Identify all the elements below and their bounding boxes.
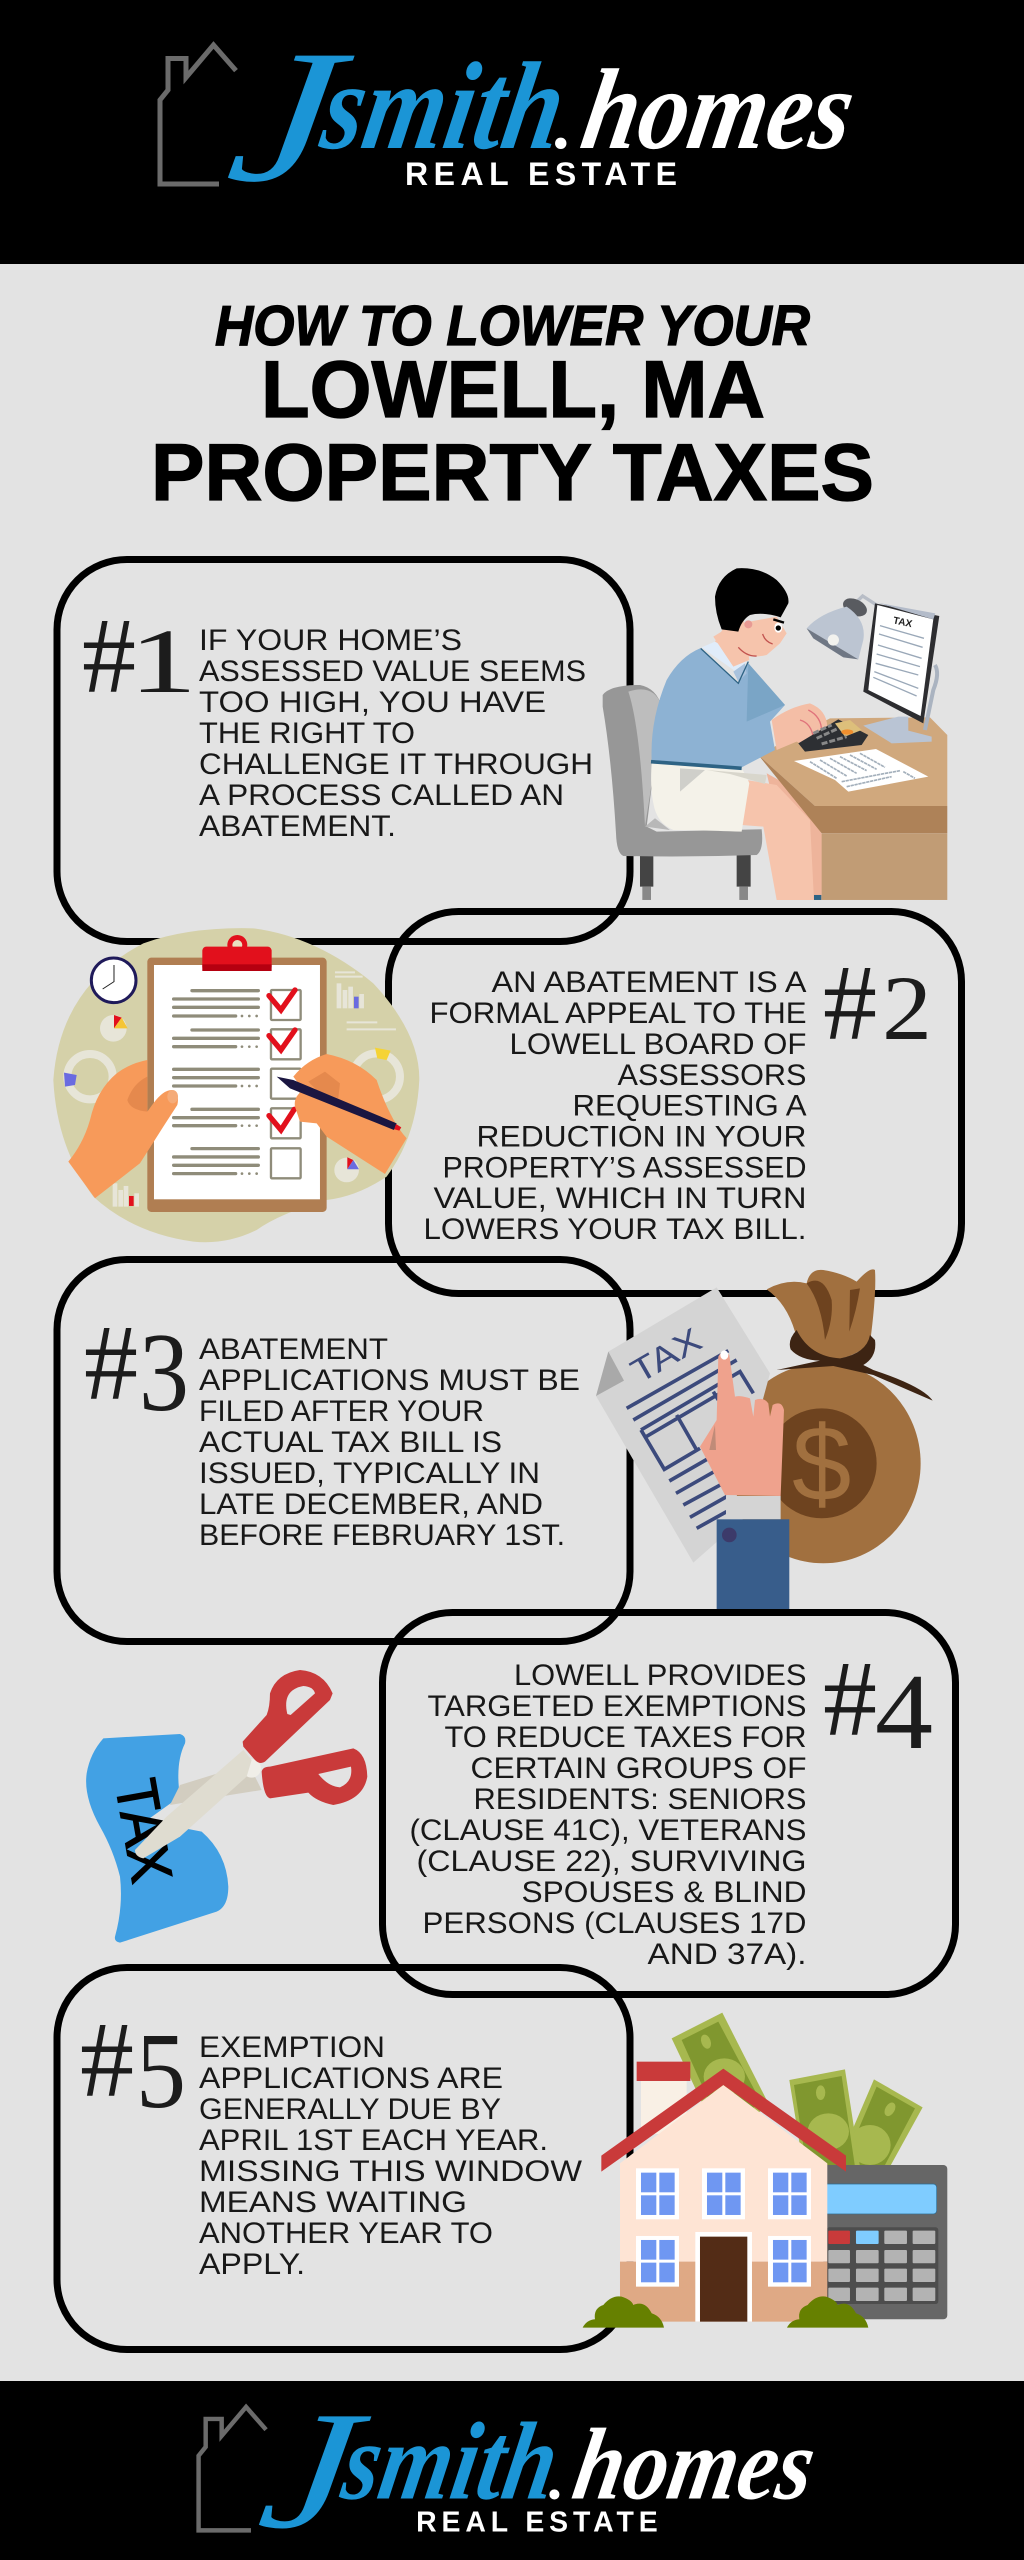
number 4: 4: [875, 1653, 933, 1772]
icon: scissors cutting tax paper: [86, 1670, 367, 1943]
text block 2: PROPERTY’S ASSESSED: [442, 1152, 806, 1184]
icon: tax form, pointing hand and money bag: [596, 1269, 933, 1609]
text block 5: APPLICATIONS ARE: [199, 2062, 503, 2095]
title: PROPERTY TAXES: [151, 428, 874, 518]
logo wordmark J: J: [218, 12, 362, 222]
text block 3: FILED AFTER YOUR: [199, 1395, 484, 1428]
number 2: 2: [882, 957, 932, 1059]
dollar sign: $: [792, 1404, 851, 1524]
panel: step 2: [53, 912, 961, 1294]
logo dot: .: [552, 87, 570, 164]
text block 3: BEFORE FEBRUARY 1ST.: [199, 1519, 565, 1552]
number 3: #: [84, 1304, 138, 1423]
logo wordmark smith: smith: [312, 38, 575, 176]
text block 2: FORMAL APPEAL TO THE: [430, 997, 806, 1030]
text block 5: APRIL 1ST EACH YEAR.: [199, 2124, 548, 2157]
text block 3: [199, 1333, 580, 1552]
title: [151, 294, 874, 518]
text block 5: APPLY.: [199, 2248, 305, 2281]
number 1: 1: [129, 610, 197, 712]
number 2: #: [823, 944, 877, 1063]
pointing hand: [700, 1350, 784, 1496]
text block 1: TOO HIGH, YOU HAVE: [199, 686, 546, 719]
money: [672, 2013, 923, 2167]
text block 4: (CLAUSE 22), SURVIVING: [416, 1845, 806, 1878]
text block 2: VALUE, WHICH IN TURN: [434, 1182, 806, 1215]
text block 2: ASSESSORS: [618, 1059, 806, 1092]
text block 5: [199, 2031, 583, 2281]
icon: man at desk with calculator: [603, 568, 947, 900]
text block 3: ISSUED, TYPICALLY IN: [199, 1457, 540, 1490]
text block 5: GENERALLY DUE BY: [199, 2093, 501, 2126]
panel: step 1: [57, 560, 947, 942]
text block 1: IF YOUR HOME’S: [199, 624, 462, 657]
text block 4: AND 37A).: [648, 1938, 806, 1971]
text block 1: THE RIGHT TO: [199, 717, 415, 750]
number 5: 5: [136, 2012, 186, 2131]
text block 5: EXEMPTION: [199, 2031, 385, 2064]
text block 2: [424, 966, 806, 1246]
icon: man at desk with calculator: TAX: [892, 616, 913, 630]
panel: step 3: [57, 1260, 933, 1642]
text block 5: MISSING THIS WINDOW: [199, 2155, 583, 2188]
text block 5: ANOTHER YEAR TO: [199, 2217, 493, 2250]
text block 1: CHALLENGE IT THROUGH: [199, 748, 593, 781]
logo wordmark homes: homes: [573, 47, 864, 174]
logo wordmark J: J: [250, 2377, 377, 2560]
icon: scissors cutting tax paper: TAX: [102, 1774, 184, 1887]
logo: header: [160, 12, 864, 222]
text block 4: LOWELL PROVIDES: [514, 1659, 806, 1692]
logo tagline: REAL ESTATE: [416, 2506, 658, 2538]
logo: footer: [199, 2377, 824, 2560]
logo tagline: REAL ESTATE: [405, 156, 677, 192]
text block 3: APPLICATIONS MUST BE: [199, 1364, 580, 1397]
title: LOWELL, MA: [261, 345, 765, 435]
text block 1: A PROCESS CALLED AN: [199, 779, 564, 812]
text block 2: REQUESTING A: [572, 1090, 806, 1122]
text block 2: AN ABATEMENT IS A: [492, 966, 806, 999]
number 3: [84, 1304, 189, 1435]
tax form: [596, 1287, 770, 1563]
icon: house outline: [160, 45, 236, 184]
panel: step 4: [86, 1612, 956, 1994]
panel: step 5: [57, 1968, 947, 2350]
number 2: [823, 944, 932, 1063]
header band: [0, 0, 1024, 264]
text block 5: MEANS WAITING: [199, 2186, 467, 2219]
text block 3: ACTUAL TAX BILL IS: [199, 1426, 502, 1459]
number 4: #: [823, 1640, 877, 1759]
logo dot: .: [547, 2444, 562, 2512]
text block 4: CERTAIN GROUPS OF: [470, 1752, 806, 1785]
text block 4: TARGETED EXEMPTIONS: [428, 1690, 806, 1723]
text block 2: LOWELL BOARD OF: [510, 1028, 806, 1061]
tax form: TAX: [625, 1321, 708, 1391]
house: [583, 2062, 868, 2328]
text block 4: [410, 1659, 806, 1971]
text block 1: ABATEMENT.: [199, 810, 396, 843]
left hand: [68, 1060, 178, 1198]
text block 1: ASSESSED VALUE SEEMS: [199, 655, 586, 688]
logo wordmark homes: homes: [566, 2408, 824, 2521]
number 5: #: [80, 2001, 134, 2120]
title: HOW TO LOWER YOUR: [215, 294, 810, 358]
number 1: [82, 597, 197, 716]
footer band: [0, 2377, 1024, 2560]
text block 4: RESIDENTS: SENIORS: [474, 1783, 806, 1816]
text block 4: TO REDUCE TAXES FOR: [444, 1721, 806, 1754]
logo wordmark smith: smith: [334, 2400, 568, 2523]
number 3: 3: [139, 1311, 189, 1435]
number 5: [80, 2001, 186, 2131]
text block 3: ABATEMENT: [199, 1333, 388, 1366]
right hand with pen: [277, 1054, 407, 1174]
icon: checklist clipboard with hands: [53, 928, 419, 1242]
clock: [91, 958, 136, 1003]
text block 4: SPOUSES & BLIND: [522, 1876, 806, 1909]
text block 2: REDUCTION IN YOUR: [476, 1120, 806, 1154]
icon: house, money and calculator: [583, 2013, 947, 2328]
text block 2: LOWERS YOUR TAX BILL.: [424, 1213, 806, 1246]
text block 4: (CLAUSE 41C), VETERANS: [410, 1814, 806, 1847]
number 4: [823, 1640, 933, 1772]
number 1: #: [82, 597, 136, 716]
text block 1: [199, 624, 593, 843]
calculator: [823, 2165, 947, 2319]
text block 3: LATE DECEMBER, AND: [199, 1488, 543, 1521]
icon: house outline: [199, 2407, 266, 2530]
text block 4: PERSONS (CLAUSES 17D: [422, 1907, 806, 1940]
